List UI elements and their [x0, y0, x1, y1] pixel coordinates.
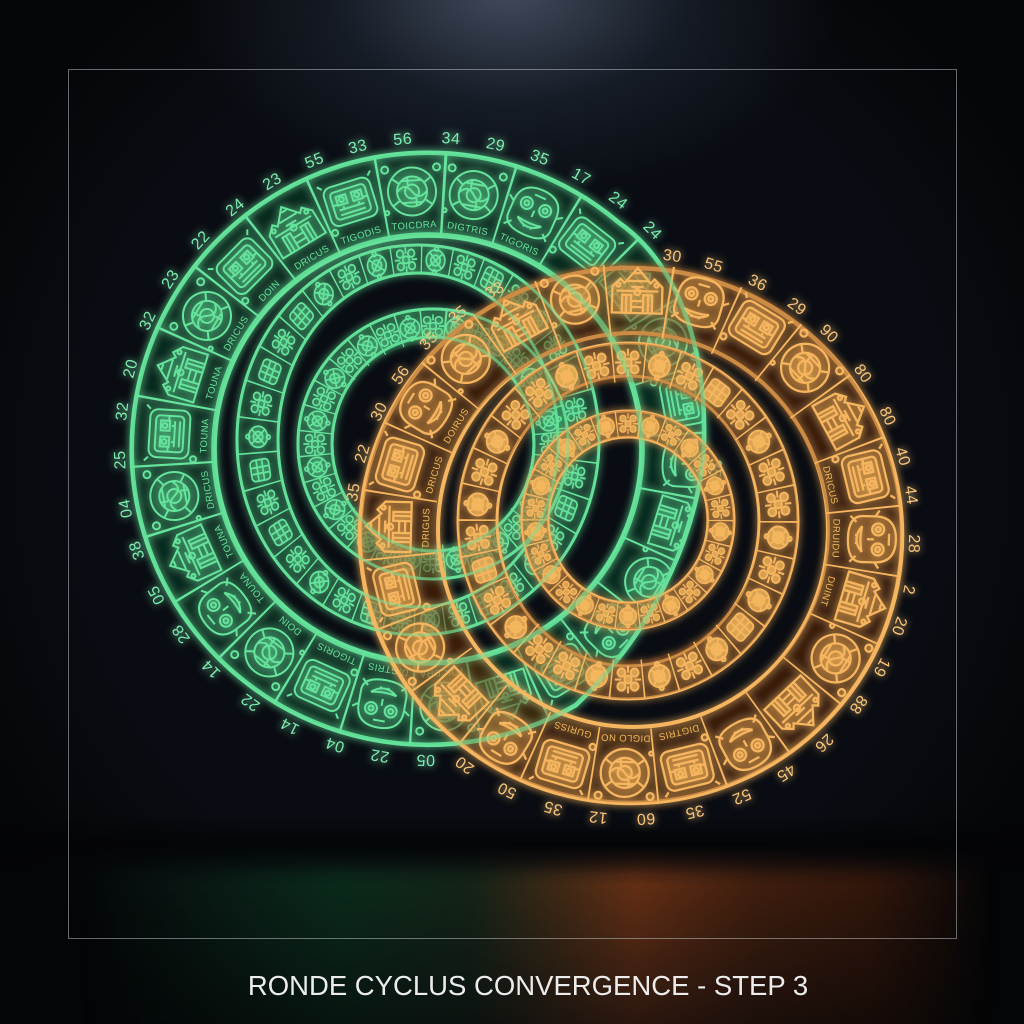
green numbers: 34: [441, 130, 461, 148]
orange numbers: 33: [483, 279, 507, 303]
orange numbers: 22: [352, 442, 374, 465]
orange outer band captions: DIGTRIS: [657, 722, 700, 742]
green outer band captions: TOICDRA: [419, 665, 465, 679]
orange numbers: 30: [368, 399, 391, 424]
orange numbers: 35: [683, 801, 706, 822]
green numbers: 20: [120, 357, 142, 380]
orange outer band captions: DRICUS: [424, 455, 446, 495]
green outer band captions: TIGORIS: [315, 639, 358, 667]
orange numbers: 55: [702, 255, 725, 277]
orange numbers: 19: [869, 655, 893, 680]
orange outer band captions: [421, 406, 841, 744]
green outer band captions: DIGTRIS: [446, 220, 489, 238]
orange numbers: 12: [588, 807, 608, 826]
floor glow: [152, 850, 969, 1024]
green outer band captions: TOUNA: [204, 364, 225, 401]
green numbers: 32: [137, 309, 160, 333]
green numbers: 32: [113, 401, 132, 422]
green outer band captions: TOUNA: [237, 570, 268, 604]
green numbers: 33: [347, 137, 369, 158]
orange numbers: 30: [662, 247, 683, 266]
orange outer band captions: DRUIDU: [829, 519, 841, 558]
orange numbers: 20: [452, 752, 478, 777]
green outer glyphs: [143, 163, 712, 735]
orange rings: [360, 268, 902, 803]
orange outer band captions: DRICUS: [820, 465, 840, 505]
orange numbers: 45: [773, 760, 798, 785]
green rings: [132, 153, 704, 745]
green outer band captions: DRICUS: [199, 470, 217, 510]
title: RONDE CYCLUS CONVERGENCE - STEP 3: [248, 970, 808, 1001]
green overlay lines through orange wheel: [132, 153, 704, 745]
orange numbers: 50: [495, 778, 519, 802]
green numbers: 04: [116, 497, 136, 519]
orange outer band captions: DIGLO NO: [601, 731, 651, 744]
orange numbers: 29: [784, 295, 809, 320]
orange numbers: 60: [636, 809, 656, 827]
green numbers: 24: [605, 189, 631, 214]
green outer band captions: [198, 219, 540, 679]
green numbers: 14: [278, 714, 302, 738]
orange wheel: [360, 266, 902, 803]
green outer band captions: TIGODIS: [340, 224, 383, 247]
orange numbers: 35: [417, 328, 442, 354]
green numbers: 35: [528, 147, 552, 169]
green numbers: 04: [323, 733, 347, 755]
orange outer band: [364, 266, 898, 800]
green numbers: [112, 130, 724, 768]
green outer band captions: TOICDRA: [391, 219, 437, 233]
green numbers: 35: [706, 459, 724, 479]
orange middle band: [462, 347, 794, 695]
green numbers: 55: [303, 150, 327, 173]
green numbers: 23: [260, 170, 285, 194]
orange outer glyphs: [365, 267, 897, 800]
orange numbers: 44: [901, 485, 920, 506]
horizon shadow: [0, 815, 1024, 875]
green outer band captions: DRICUS: [293, 243, 332, 273]
orange numbers: 56: [389, 362, 414, 388]
green numbers: 29: [484, 135, 507, 156]
green wheel: [132, 153, 712, 745]
green numbers: 25: [112, 450, 130, 470]
green numbers: 22: [188, 228, 214, 253]
green outer band: [143, 163, 712, 735]
orange numbers: 26: [811, 730, 836, 755]
orange numbers: 88: [845, 692, 870, 717]
green outer band captions: TOUNA: [212, 523, 237, 559]
green numbers: 22: [369, 745, 391, 765]
green outer band captions: DRICUS: [222, 314, 251, 353]
orange numbers: 80: [875, 404, 899, 429]
orange outer band captions: DOIRUS: [442, 406, 472, 446]
orange numbers: [344, 247, 922, 827]
green numbers: 05: [416, 751, 435, 768]
green middle band: [236, 242, 597, 633]
orange outer band captions: GURISS: [553, 718, 593, 740]
orange numbers: 35: [446, 302, 471, 328]
orange numbers: 28: [905, 534, 922, 554]
frame: [68, 70, 956, 938]
orange numbers: 20: [888, 614, 910, 638]
orange numbers: 52: [729, 785, 753, 808]
green outer band captions: TOUNA: [198, 418, 211, 454]
green outer band captions: DOIN: [277, 613, 304, 637]
orange numbers: 35: [344, 481, 364, 503]
orange numbers: 40: [891, 445, 913, 468]
green numbers: 28: [169, 621, 194, 646]
green numbers: 17: [569, 165, 593, 189]
orange numbers: 36: [745, 272, 770, 295]
green inner band: [303, 314, 563, 574]
orange numbers: 35: [542, 797, 565, 818]
green numbers: 23: [159, 267, 183, 292]
green outer band captions: DIGTRIS: [367, 660, 410, 678]
green numbers: 24: [639, 218, 665, 244]
green numbers: 24: [223, 195, 248, 220]
green numbers: 05: [145, 582, 169, 607]
orange numbers: 80: [850, 361, 875, 387]
green outer band captions: TIGORIS: [498, 231, 540, 258]
green numbers: 22: [238, 689, 263, 714]
green numbers: 56: [393, 130, 413, 149]
orange inner band: [524, 413, 732, 628]
orange numbers: 2: [899, 584, 918, 596]
orange outer band captions: DUINT: [817, 575, 837, 608]
green numbers: 38: [126, 538, 149, 562]
orange numbers: 90: [816, 321, 841, 347]
orange outer band captions: DRIGUS: [421, 508, 433, 547]
green numbers: 14: [199, 656, 224, 681]
green outer band captions: DOIN: [257, 278, 283, 304]
